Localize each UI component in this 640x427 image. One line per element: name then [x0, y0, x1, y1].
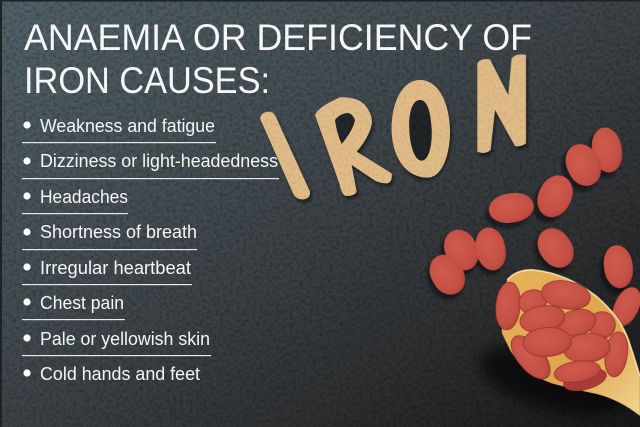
letter I — [260, 112, 310, 199]
pill 7 — [423, 248, 472, 301]
pills in spoon — [494, 277, 630, 395]
cork letter shadows — [262, 58, 528, 203]
pill 3 — [531, 170, 579, 223]
letter R — [315, 97, 392, 196]
pill 1 — [589, 125, 625, 175]
pill 2 — [559, 138, 607, 192]
letter N — [477, 54, 526, 153]
item: weakness and fatigue: Weakness and fatigue — [40, 116, 215, 136]
item: dizziness: Dizziness or light-headedness — [40, 151, 278, 171]
item: cold hands and feet: Cold hands and feet — [40, 364, 200, 384]
wooden spoon — [502, 270, 640, 416]
spoon shadow — [472, 331, 635, 427]
item: dizziness — [22, 151, 279, 179]
pill 6 — [472, 225, 510, 273]
item: irregular heartbeat — [22, 258, 192, 285]
item: pale or yellowish skin — [22, 329, 211, 356]
pill 9 — [601, 243, 636, 290]
pills and spoon — [420, 125, 640, 427]
title: IRON CAUSES: — [24, 60, 270, 101]
symptom list — [22, 116, 279, 384]
cork letters: IRON — [260, 54, 528, 203]
pill shadows — [420, 129, 633, 307]
item: headaches — [22, 187, 128, 214]
title: ANAEMIA OR DEFICIENCY OF — [24, 17, 532, 58]
item: shortness of breath — [22, 222, 197, 250]
item: weakness and fatigue — [22, 116, 216, 143]
item: shortness of breath: Shortness of breath — [40, 222, 197, 242]
item: headaches: Headaches — [40, 187, 128, 207]
pill 5 — [438, 224, 485, 276]
pill 8 — [531, 222, 581, 274]
title — [24, 17, 532, 101]
item: chest pain — [22, 293, 125, 320]
spoon rim highlight — [507, 270, 640, 377]
pill 4 — [487, 190, 536, 226]
letter O — [392, 80, 450, 178]
pill 10 — [607, 283, 640, 330]
item: irregular heartbeat: Irregular heartbeat — [40, 258, 191, 278]
item: pale or yellowish skin: Pale or yellowish skin — [40, 329, 210, 349]
item: chest pain: Chest pain — [40, 293, 124, 313]
